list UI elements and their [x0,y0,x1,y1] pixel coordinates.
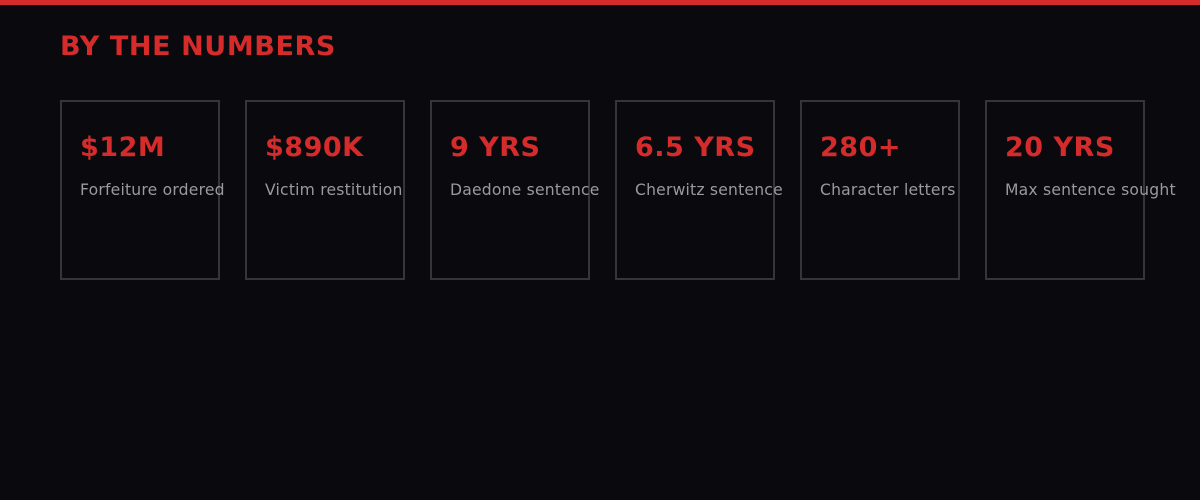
title: BY THE NUMBERS [60,31,336,62]
card: forfeiture: Forfeiture ordered [80,181,225,199]
card: daedone: 9 YRS [450,132,540,163]
card: forfeiture: $12M [80,132,165,163]
card: forfeiture [60,100,220,280]
card: letters: Character letters [820,181,956,199]
top accent bar [0,0,1200,5]
card: restitution: $890K [265,132,364,163]
card: max sentence: Max sentence sought [1005,181,1176,199]
card: cherwitz: Cherwitz sentence [635,181,783,199]
card: max sentence: 20 YRS [1005,132,1115,163]
card: letters [800,100,960,280]
card: cherwitz [615,100,775,280]
card: restitution: Victim restitution [265,181,403,199]
card: max sentence [985,100,1145,280]
card: letters: 280+ [820,132,901,163]
card: daedone: Daedone sentence [450,181,600,199]
card: restitution [245,100,405,280]
card: daedone [430,100,590,280]
card: cherwitz: 6.5 YRS [635,132,756,163]
